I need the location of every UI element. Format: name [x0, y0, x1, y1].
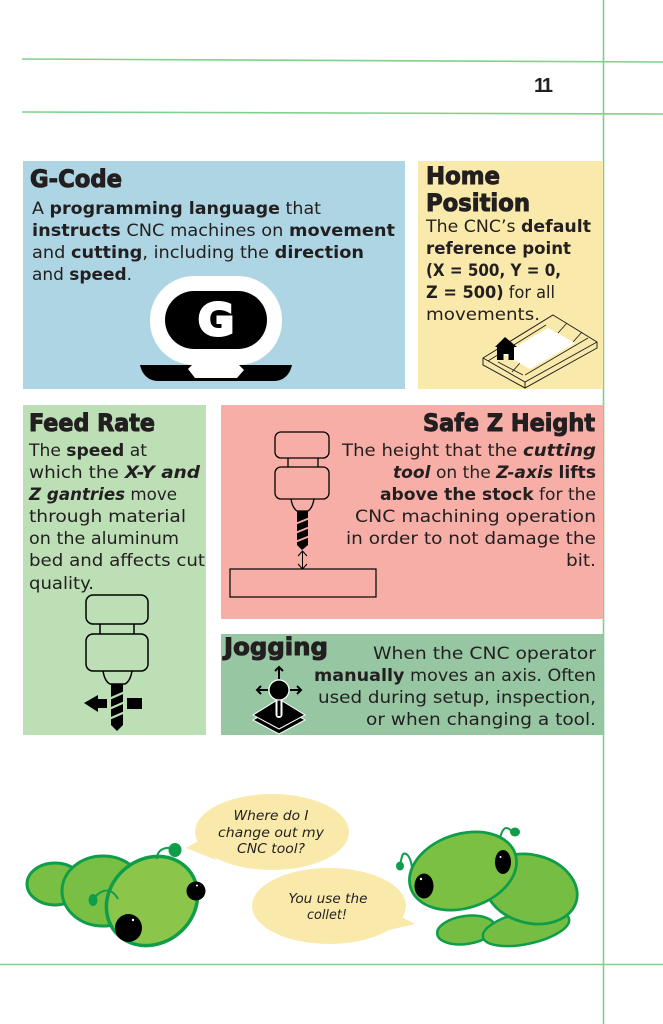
page number: 11 — [534, 75, 553, 97]
character: left bug — [27, 838, 216, 964]
panel: Jogging — [221, 633, 603, 735]
text: Feed Rate definition: bed and affects cut — [29, 551, 205, 571]
text: Safe Z Height definition: in order to not damage the — [346, 529, 596, 549]
panel: Home Position — [418, 161, 603, 389]
character: right bug — [396, 819, 585, 953]
text: Safe Z Height definition: The height that the cutting — [341, 441, 596, 461]
icon: G badge: G — [198, 295, 234, 346]
text: Home Position definition — [425, 217, 591, 325]
text: Jogging definition: or when changing a tool. — [366, 710, 596, 730]
text: Safe Z Height definition: bit. — [566, 551, 596, 571]
icon: spindle moving sideways — [84, 595, 148, 731]
text: Home Position definition: movements. — [426, 305, 540, 325]
text: Safe Z Height definition: above the stock for the — [380, 485, 596, 505]
heading: Jogging: Jogging — [222, 633, 328, 661]
text: G-Code definition: and cutting, including the direction — [32, 243, 364, 263]
heading: Home Position: Position — [426, 189, 530, 217]
icon: G badge — [140, 276, 292, 381]
heading: Home Position — [426, 162, 530, 217]
text: Safe Z Height definition: tool on the Z-axis lifts — [393, 463, 596, 483]
text: G-Code definition: instructs CNC machines on movement — [32, 221, 395, 241]
icon: home on machine bed — [483, 315, 597, 388]
text: Home Position definition: reference point — [426, 239, 571, 259]
panel: Safe Z Height — [221, 405, 603, 619]
speech bubble: answer: You use the — [288, 892, 368, 907]
speech bubble: question: Where do I — [234, 809, 309, 824]
text: Safe Z Height definition — [341, 441, 596, 571]
text: Jogging definition: manually moves an axis. Often — [314, 666, 596, 686]
speech bubble: question: CNC tool? — [237, 842, 305, 857]
text: Home Position definition: (X = 500, Y = 0, — [426, 261, 561, 281]
text: G-Code definition: and speed. — [32, 265, 132, 285]
panel: Feed Rate — [23, 405, 206, 735]
text: Jogging definition: When the CNC operator — [373, 644, 596, 664]
heading: G-Code: G-Code — [30, 165, 122, 193]
text: G-Code definition: A programming language that — [32, 199, 321, 219]
text: Feed Rate definition — [28, 441, 205, 594]
heading: Feed Rate: Feed Rate — [29, 409, 155, 437]
speech bubble: answer — [252, 868, 415, 944]
text: Feed Rate definition: Z gantries move — [28, 485, 177, 505]
text: Home Position definition: The CNC’s default — [425, 217, 591, 237]
speech bubble: question: change out my — [218, 826, 324, 841]
text: Jogging definition: used during setup, inspection, — [318, 688, 596, 708]
panel: G-Code — [23, 161, 405, 389]
text: Feed Rate definition: The speed at — [28, 441, 147, 461]
text: Feed Rate definition: through material — [29, 507, 186, 527]
text: Feed Rate definition: quality. — [29, 574, 94, 594]
text: G-Code definition — [32, 199, 395, 285]
icon: spindle above stock — [230, 432, 376, 597]
speech bubble: question — [186, 794, 349, 870]
heading: Home Position: Home — [426, 162, 500, 190]
text: Feed Rate definition: on the aluminum — [29, 529, 179, 549]
text: Jogging definition — [314, 644, 596, 730]
heading: Safe Z Height: Safe Z Height — [423, 409, 595, 437]
speech bubble: answer: collet! — [307, 908, 347, 923]
text: Feed Rate definition: which the X-Y and — [29, 463, 201, 483]
text: Safe Z Height definition: CNC machining operation — [355, 507, 596, 527]
text: Home Position definition: Z = 500) for all — [426, 283, 555, 303]
icon: joystick — [253, 667, 305, 734]
